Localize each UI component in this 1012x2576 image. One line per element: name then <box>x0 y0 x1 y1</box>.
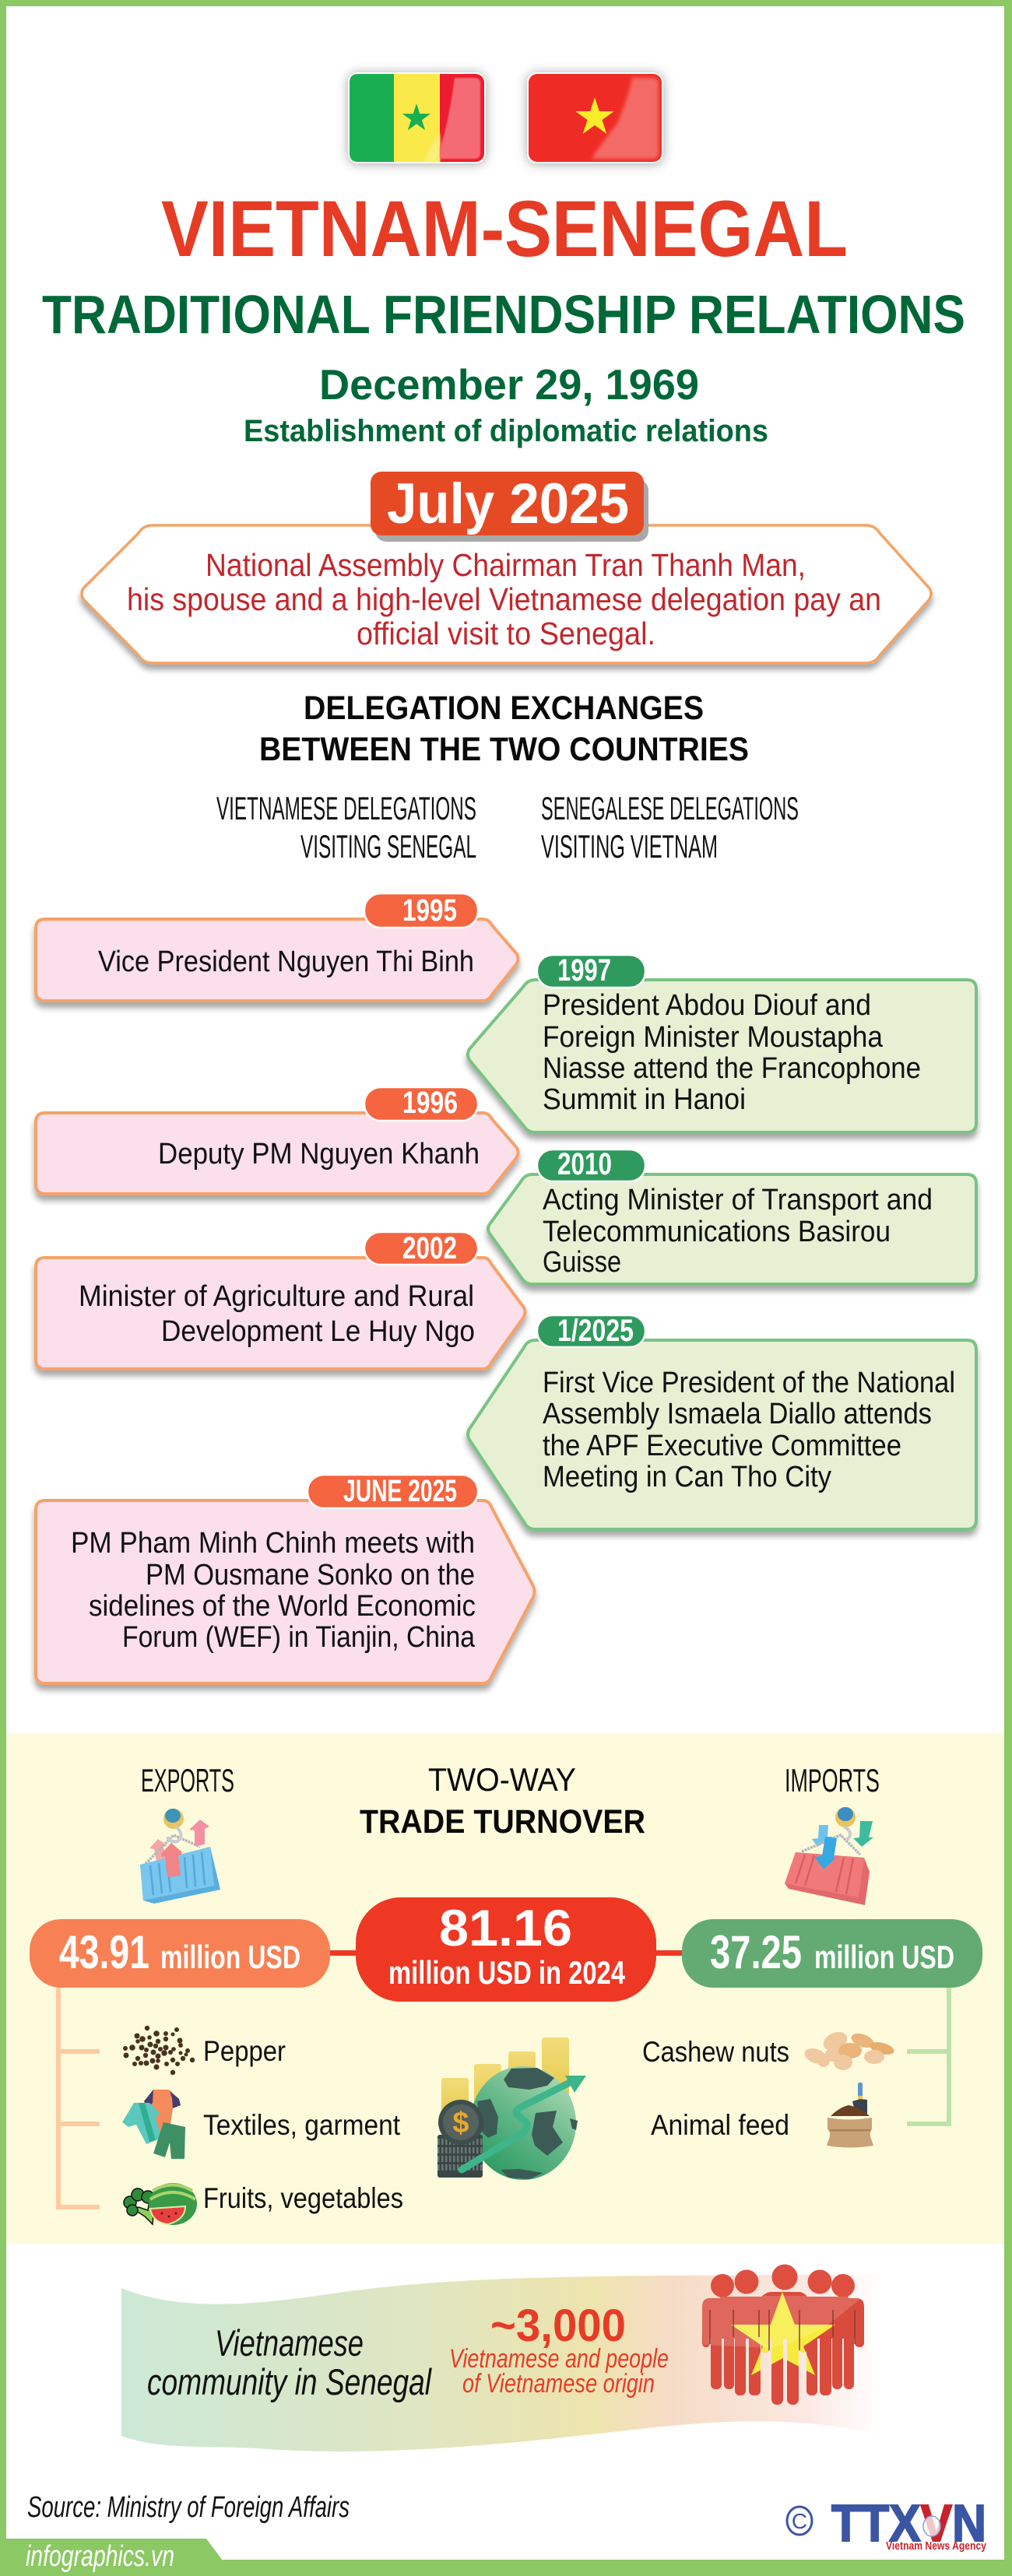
text: Foreign Minister Moustapha <box>543 1021 884 1054</box>
icon: fruits and vegetables <box>124 2183 197 2225</box>
year pill: 2002: 2002 <box>402 1231 457 1265</box>
text: PM Pham Minh Chinh meets with <box>71 1527 475 1560</box>
column heading: Vietnamese delegations <box>216 790 476 865</box>
icon: globe, coins and bar chart: $ <box>452 2107 469 2139</box>
text <box>543 1367 955 1493</box>
column heading: Senegalese delegations: SENEGALESE DELEGATIONS <box>541 790 799 826</box>
icon: copyright <box>787 2507 812 2535</box>
panel: trade turnover <box>6 1733 1004 2244</box>
panel: 1/2025 <box>468 1314 976 1529</box>
text: Minister of Agriculture and Rural <box>79 1280 474 1313</box>
panel: 1995 <box>36 893 518 1001</box>
tree lines: exports <box>58 1988 100 2207</box>
heading: delegation exchanges <box>259 690 749 768</box>
badge: July 2025: July 2025 <box>387 472 629 535</box>
panel: 2002 <box>36 1231 525 1369</box>
text: community label: community in Senegal <box>147 2361 432 2402</box>
label: cashew nuts: Cashew nuts <box>642 2036 789 2068</box>
icon: textiles <box>122 2090 185 2159</box>
text: President Abdou Diouf and <box>543 989 871 1022</box>
text: the APF Executive Committee <box>543 1430 901 1462</box>
icon: globe, coins and bar chart <box>437 2037 586 2180</box>
hexagon panel <box>82 525 931 663</box>
year pill: 2010: 2010 <box>557 1147 612 1181</box>
tree lines: imports <box>907 1988 949 2124</box>
year pill: 2010 <box>537 1147 645 1181</box>
text: Assembly Ismaela Diallo attends <box>543 1398 932 1430</box>
logo: TTXVN: Vietnam News Agency <box>886 2539 987 2553</box>
visit description: official visit to Senegal. <box>357 616 655 651</box>
year pill: June 2025: JUNE 2025 <box>343 1474 457 1508</box>
text <box>543 989 921 1116</box>
heading: delegation exchanges: DELEGATION EXCHANGES <box>304 690 704 727</box>
panel: 2010 <box>488 1147 976 1284</box>
text: sidelines of the World Economic <box>89 1590 476 1623</box>
footer tab: infographics.vn <box>26 2540 174 2573</box>
icon: import container <box>785 1807 873 1905</box>
date caption: Establishment of diplomatic relations <box>244 414 768 448</box>
text: Deputy PM Nguyen Khanh <box>158 1138 480 1170</box>
year pill: 1995: 1995 <box>402 893 457 928</box>
text: Acting Minister of Transport and <box>543 1184 933 1216</box>
stat caption: Vietnamese and people <box>449 2344 669 2374</box>
icon: people with Vietnamese star <box>702 2265 864 2405</box>
icon: cashew nuts <box>803 2028 895 2070</box>
icon: export container <box>140 1809 220 1904</box>
pill: imports value: 37.25 <box>710 1926 802 1978</box>
label: animal feed: Animal feed <box>651 2109 789 2141</box>
text: Telecommunications Basirou <box>543 1216 891 1248</box>
text: First Vice President of the National <box>543 1367 955 1399</box>
icon: animal feed sack <box>827 2083 873 2148</box>
heading: two-way trade turnover: TRADE TURNOVER <box>360 1803 645 1841</box>
heading: two-way trade turnover <box>360 1761 645 1841</box>
text: Summit in Hanoi <box>543 1083 746 1116</box>
label: imports: IMPORTS <box>785 1762 880 1799</box>
date: December 29, 1969 <box>319 360 699 409</box>
visit description: National Assembly Chairman Tran Thanh Man, <box>206 547 806 583</box>
stat caption <box>449 2344 669 2399</box>
icon: Vietnam flag <box>527 72 663 163</box>
icon: pepper <box>123 2026 195 2075</box>
panel: 1996 <box>36 1086 518 1194</box>
text: PM Ousmane Sonko on the <box>146 1559 475 1592</box>
flags <box>348 72 663 163</box>
source note: Source: Ministry of Foreign Affairs <box>27 2491 350 2524</box>
pill: exports value: 43.91 <box>59 1926 149 1978</box>
pill: exports value <box>30 1919 330 1988</box>
title: VIETNAM-SENEGAL <box>161 184 848 273</box>
logo: TTXVN: TTXVN <box>831 2494 986 2553</box>
text: community label: Vietnamese <box>215 2322 364 2364</box>
icon: copyright: C <box>792 2509 807 2533</box>
text <box>543 1184 933 1279</box>
pill: total turnover <box>356 1897 656 2002</box>
year pill: 1997 <box>537 953 645 988</box>
heading: two-way trade turnover: TWO-WAY <box>428 1761 576 1798</box>
column heading: Senegalese delegations <box>541 790 799 865</box>
year pill: 1997: 1997 <box>557 953 611 988</box>
column heading: Senegalese delegations: VISITING VIETNAM <box>541 828 718 865</box>
text: Forum (WEF) in Tianjin, China <box>122 1621 476 1654</box>
panel: 1997 <box>468 953 976 1132</box>
stat: community size: ~3,000 <box>490 2301 626 2351</box>
text: Guisse <box>543 1246 621 1279</box>
year pill: 2002 <box>364 1231 478 1265</box>
text <box>79 1280 475 1348</box>
connector lines <box>330 1950 682 1956</box>
label: textiles, garment: Textiles, garment <box>203 2109 401 2141</box>
text: community label <box>147 2322 432 2402</box>
label: exports: EXPORTS <box>141 1762 234 1799</box>
visit description <box>127 547 881 651</box>
panel: June 2025 <box>36 1474 534 1683</box>
pill: exports value: million USD <box>160 1939 300 1975</box>
visit description: his spouse and a high-level Vietnamese delegation pay an <box>127 581 881 617</box>
year pill: 1996: 1996 <box>402 1086 458 1120</box>
heading: delegation exchanges: BETWEEN THE TWO COUNTRIES <box>259 731 749 768</box>
text: Niasse attend the Francophone <box>543 1052 921 1085</box>
year pill: 1/2025: 1/2025 <box>557 1314 634 1348</box>
pill: total turnover: million USD in 2024 <box>388 1954 625 1991</box>
icon: Senegal flag <box>348 72 486 163</box>
pill: total turnover: 81.16 <box>439 1899 572 1957</box>
year pill: 1996 <box>364 1086 478 1121</box>
label: fruits, vegetables: Fruits, vegetables <box>203 2182 403 2214</box>
column heading: Vietnamese delegations: VISITING SENEGAL <box>300 828 476 865</box>
column heading: Vietnamese delegations: VIETNAMESE DELEGATIONS <box>216 790 476 826</box>
label: pepper: Pepper <box>203 2035 286 2067</box>
text: Vice President Nguyen Thi Binh <box>98 946 474 978</box>
pill: imports value: million USD <box>814 1939 954 1975</box>
year pill: 1995 <box>364 893 478 928</box>
pill: imports value <box>682 1919 982 1988</box>
stat caption: of Vietnamese origin <box>462 2369 655 2399</box>
text: Meeting in Can Tho City <box>543 1461 831 1493</box>
text: Development Le Huy Ngo <box>161 1315 475 1348</box>
year pill: June 2025 <box>307 1474 478 1508</box>
text <box>71 1527 476 1654</box>
community ribbon <box>121 2265 881 2451</box>
callout: July 2025 visit <box>82 472 931 663</box>
